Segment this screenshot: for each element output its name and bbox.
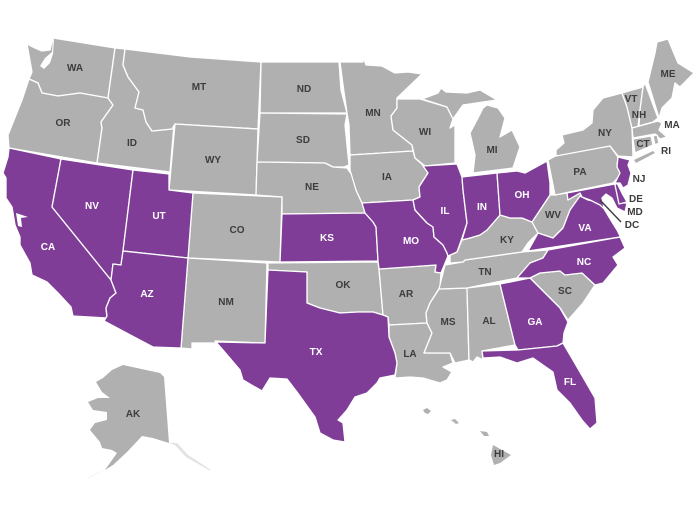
state: Tennessee (439, 250, 548, 289)
label: District of Columbia: DC (625, 220, 639, 231)
leader line: DC (600, 200, 621, 222)
state: Louisiana: LA (403, 349, 417, 360)
state: West Virginia (532, 193, 582, 238)
state: Maine: ME (660, 69, 676, 80)
state: South Dakota (257, 113, 349, 167)
state: Kentucky: KY (500, 235, 514, 246)
state: Montana (123, 49, 261, 131)
state: Vermont: VT (625, 94, 637, 105)
state: Pennsylvania: PA (573, 167, 587, 178)
state: Alabama: AL (482, 316, 496, 327)
state: Wisconsin: WI (419, 127, 431, 138)
state: New Hampshire (632, 83, 658, 126)
state: Ohio (497, 161, 550, 222)
state: Alaska: AK (126, 409, 141, 420)
state: Texas (216, 270, 397, 442)
state: Hawaii: HI (494, 449, 504, 460)
label: Massachusetts: MA (664, 120, 680, 131)
state: Wyoming: WY (205, 155, 221, 166)
state: Louisiana (389, 323, 453, 383)
state: Utah (123, 170, 193, 258)
state: Kansas: KS (320, 233, 334, 244)
state: West Virginia: WV (545, 210, 561, 221)
state: Florida (482, 343, 597, 429)
state: New Mexico: NM (218, 297, 234, 308)
state: Oklahoma: OK (336, 280, 351, 291)
state: Ohio: OH (514, 190, 530, 201)
state: Arizona (104, 251, 188, 348)
state: Washington: WA (67, 63, 83, 74)
state: Nebraska (256, 162, 365, 214)
state: South Dakota: SD (296, 135, 310, 146)
state: Arizona: AZ (140, 289, 154, 300)
state: North Dakota: ND (297, 84, 311, 95)
state: California: CA (41, 242, 55, 253)
state: Colorado: CO (230, 225, 245, 236)
state: Iowa: IA (382, 172, 392, 183)
state: Nevada (52, 159, 133, 280)
state: Maine (648, 39, 694, 118)
state: Utah: UT (152, 211, 166, 222)
label: Delaware: DE (629, 194, 643, 205)
state: Idaho: ID (127, 138, 137, 149)
state: Nebraska: NE (305, 182, 319, 193)
state: Missouri (362, 200, 448, 273)
state: South Carolina: SC (558, 286, 572, 297)
state: Vermont (622, 87, 643, 128)
state: Montana: MT (192, 82, 206, 93)
state: Georgia (500, 278, 568, 350)
state: Oregon: OR (56, 118, 71, 129)
state: Tennessee: TN (478, 267, 492, 278)
label: Rhode Island: RI (661, 146, 671, 157)
state: Wyoming (169, 124, 258, 195)
state: Colorado (188, 193, 282, 262)
state: South Carolina (530, 271, 595, 320)
state: Connecticut (633, 136, 653, 153)
state: Minnesota (340, 56, 422, 155)
state: Kansas (280, 213, 378, 262)
state: Virginia (528, 196, 620, 251)
state: Nevada: NV (85, 201, 99, 212)
state: New Jersey (615, 157, 631, 188)
label: New Jersey: NJ (633, 174, 645, 185)
state: Wisconsin (391, 99, 455, 166)
state: Minnesota: MN (365, 108, 381, 119)
state: Illinois: IL (441, 206, 449, 217)
state: New Hampshire: NH (632, 110, 646, 121)
state: Rhode Island (653, 135, 659, 145)
state: Michigan (422, 88, 520, 173)
state: New York: NY (598, 128, 612, 139)
state: Kentucky (450, 215, 538, 263)
state: Arkansas (379, 265, 441, 325)
state: California (3, 148, 116, 318)
state: Florida: FL (564, 377, 576, 388)
state: New York (556, 93, 655, 163)
state: Iowa (350, 151, 428, 203)
state: Mississippi: MS (440, 317, 456, 328)
state: Pennsylvania (548, 146, 622, 195)
state: Texas: TX (310, 347, 323, 358)
state: Indiana (462, 173, 500, 240)
state: Washington (27, 38, 115, 98)
state: Illinois (413, 164, 467, 256)
state: Oklahoma (268, 262, 383, 315)
state: Virginia: VA (578, 223, 592, 234)
state: Alaska (87, 365, 211, 478)
state: Delaware (615, 183, 627, 204)
state: Maryland (567, 184, 627, 216)
state: Michigan: MI (486, 145, 498, 156)
state: Hawaii (423, 408, 511, 465)
state: Mississippi (424, 288, 469, 363)
state: North Dakota (260, 62, 347, 113)
state: North Carolina: NC (577, 257, 591, 268)
state: North Carolina (517, 237, 625, 285)
state: Georgia: GA (528, 317, 542, 328)
state: Oregon (8, 79, 113, 163)
state: New Mexico (181, 258, 267, 349)
state: Massachusetts (632, 121, 667, 139)
state: Arkansas: AR (399, 289, 414, 300)
label: Maryland: MD (627, 207, 643, 218)
state: Alabama (467, 284, 515, 362)
state: Missouri: MO (403, 236, 419, 247)
state: Indiana: IN (477, 202, 487, 213)
state: Connecticut: CT (636, 139, 650, 150)
state: Idaho (97, 48, 174, 172)
